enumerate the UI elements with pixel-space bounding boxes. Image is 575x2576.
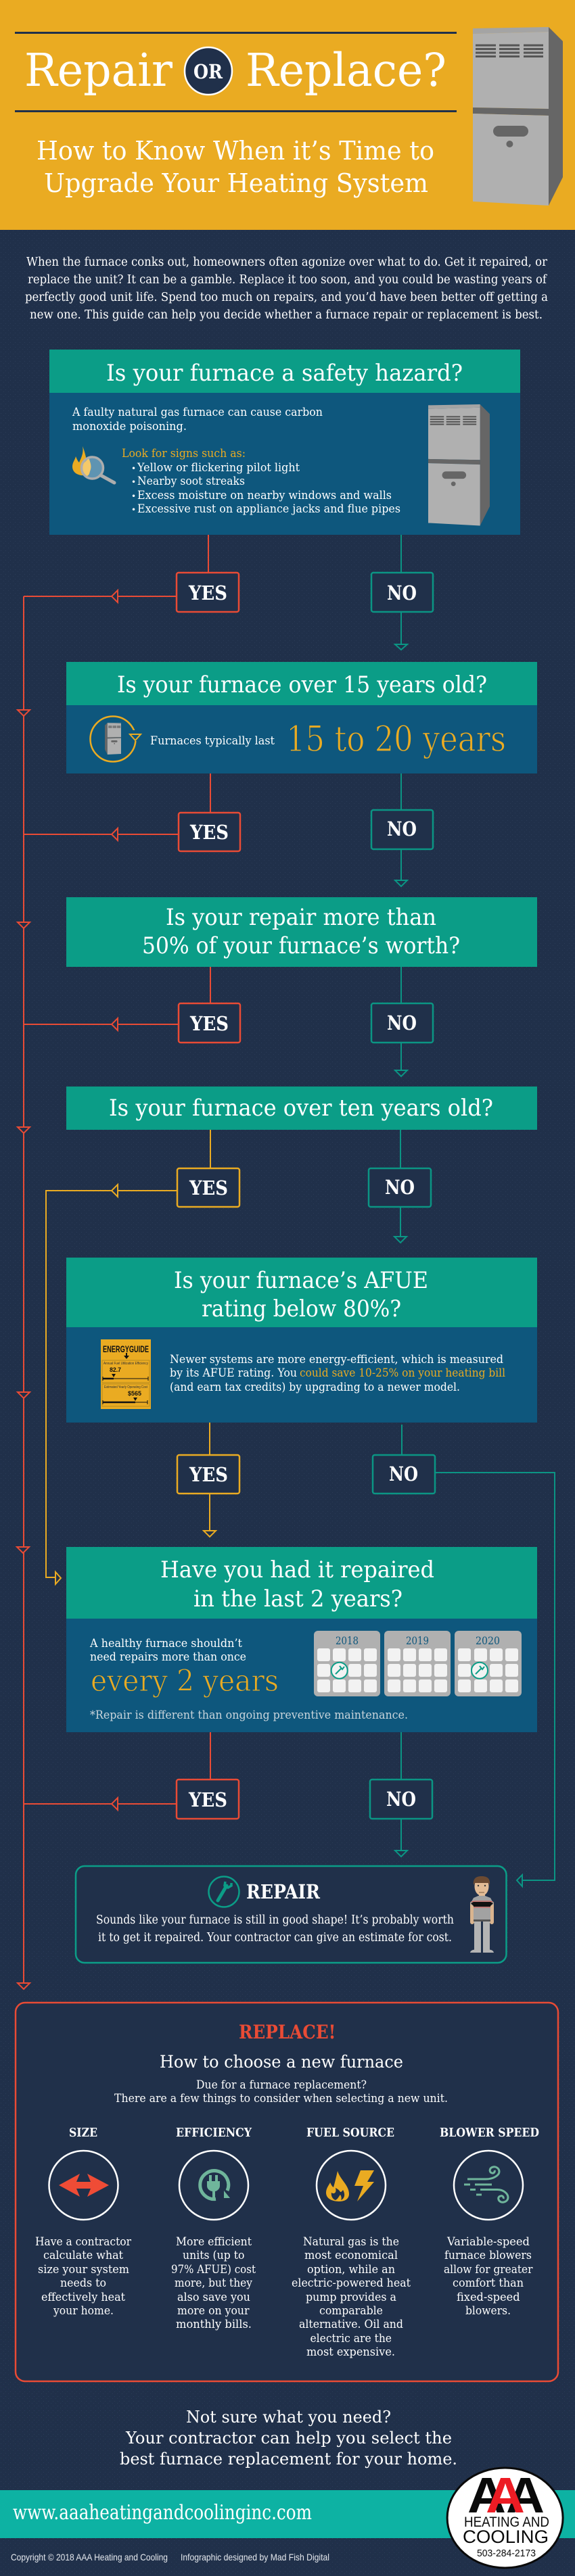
column: fuel source: most expensive. (306, 2345, 395, 2359)
heading: 50% of your furnace’s worth? (142, 932, 460, 959)
text block (170, 1353, 505, 1394)
column: blower speed (440, 2126, 539, 2318)
text block: need repairs more than once (90, 1650, 246, 1664)
heading: rating below 80%? (202, 1295, 401, 1322)
flow: 50 percent yes: YES (189, 1012, 229, 1035)
column: size: Have a contractor (35, 2235, 132, 2249)
logo: A (506, 2467, 545, 2523)
column: efficiency: more, but they (175, 2276, 252, 2290)
column: size: calculate what (43, 2249, 123, 2262)
column: fuel source: comparable (319, 2304, 383, 2318)
column: blower speed: furnace blowers (444, 2249, 532, 2262)
heading (160, 1556, 434, 1612)
sign list (122, 447, 400, 516)
column: fuel source: FUEL SOURCE (306, 2126, 394, 2140)
logo: A (486, 2467, 525, 2523)
flow: ten years no: NO (385, 1176, 415, 1199)
icon: wind (464, 2167, 508, 2202)
heading (174, 1267, 428, 1322)
icon: energy guide label: 82.7 (110, 1366, 121, 1373)
text block: Newer systems are more energy-efficient, which is measured (170, 1353, 503, 1366)
text block (96, 1913, 454, 1945)
intro text (25, 256, 548, 322)
flow: AFUE no: NO (389, 1462, 418, 1485)
logo: A (467, 2467, 506, 2523)
flow: last 2 years no (370, 1732, 432, 1857)
icon: size arrows (59, 2174, 109, 2197)
flow: AFUE no (373, 1425, 435, 1494)
teal no bypass line (435, 1473, 555, 1886)
lifespan number: 15 to 20 years (286, 719, 506, 760)
column: efficiency: 97% AFUE) cost (171, 2263, 256, 2276)
sign list: Excess moisture on nearby windows and walls (137, 489, 392, 502)
text block (89, 1637, 246, 1664)
panel: over ten years (66, 1087, 537, 1130)
subtitle (37, 136, 434, 198)
column: efficiency: more on your (177, 2304, 250, 2318)
flow: safety yes: YES (188, 581, 227, 604)
flow: AFUE yes (177, 1423, 239, 1537)
sign list: Excessive rust on appliance jacks and flue pipes (137, 502, 400, 516)
icon: furnace (473, 27, 563, 206)
flow: 50 percent no (371, 967, 433, 1076)
flow: safety yes (24, 535, 239, 612)
heading: Is your furnace a safety hazard? (106, 360, 463, 386)
intro: There are a few things to consider when selecting a new unit. (114, 2092, 448, 2105)
column: efficiency (171, 2126, 256, 2331)
icon: technician (470, 1876, 494, 1953)
closing text (120, 2407, 457, 2468)
heading: REPLACE! (239, 2021, 336, 2043)
heading: Is your repair more than (166, 904, 436, 930)
sign list: • (131, 464, 136, 473)
sign list: • (131, 505, 136, 515)
logo (447, 2467, 563, 2568)
flow: ten years yes (112, 1130, 239, 1207)
text block: A healthy furnace shouldn’t (89, 1637, 242, 1650)
flow: safety no: NO (387, 581, 417, 604)
calendars (314, 1631, 522, 1696)
column: fuel source: electric are the (310, 2332, 392, 2345)
heading: Have you had it repaired (160, 1556, 434, 1583)
column: size (35, 2126, 132, 2318)
column: fuel source: alternative. Oil and (299, 2318, 403, 2331)
panel: repair result (76, 1866, 506, 1963)
flow: last 2 years yes (24, 1732, 239, 1819)
column: fuel source: option, while an (307, 2263, 395, 2276)
panel: repaired in last 2 years (66, 1547, 537, 1732)
large callout: every 2 years (91, 1664, 279, 1698)
heading: Is your furnace over ten years old? (109, 1095, 493, 1121)
text block: (and earn tax credits) by upgrading to a newer model. (170, 1381, 460, 1394)
flow: 15 years no: NO (387, 817, 417, 840)
flow: 50 percent yes (24, 967, 240, 1043)
panel: replace (16, 2003, 558, 2381)
header banner (0, 0, 575, 230)
column: blower speed: blowers. (465, 2304, 511, 2318)
column: blower speed: allow for greater (444, 2263, 533, 2276)
intro text: perfectly good unit life. Spend too much on repairs, and you’d have been better off getting a (25, 291, 548, 304)
panel: over 15 years (66, 662, 537, 773)
text block (72, 406, 323, 433)
logo: HEATING AND (464, 2514, 549, 2530)
text block: by its AFUE rating. You (170, 1366, 297, 1380)
subtitle: How to Know When it’s Time to (37, 136, 434, 166)
title: Repair (24, 44, 173, 97)
flow: 15 years yes (24, 773, 240, 851)
sign list: • (131, 477, 136, 487)
column: efficiency: EFFICIENCY (176, 2126, 252, 2140)
flow: 15 years no (371, 773, 433, 886)
column: blower speed: comfort than (453, 2276, 524, 2290)
heading: Is your furnace’s AFUE (174, 1267, 428, 1293)
icon: flame and magnifier (72, 446, 114, 483)
column: efficiency: More efficient (176, 2235, 252, 2249)
column: fuel source: pump provides a (306, 2291, 396, 2304)
logo: COOLING (463, 2527, 549, 2547)
text block: Sounds like your furnace is still in good shape! It’s probably worth (96, 1913, 454, 1927)
flow: last 2 years no: NO (386, 1788, 416, 1811)
title: Replace? (246, 44, 446, 97)
footer band (0, 2490, 575, 2538)
column: blower speed: Variable-speed (446, 2235, 530, 2249)
logo: 503-284-2173 (477, 2548, 536, 2559)
subtitle: Upgrade Your Heating System (44, 168, 428, 198)
sign list: • (131, 492, 136, 501)
icon: energy guide label: Estimated Yearly Operating Cost (104, 1385, 148, 1389)
column: fuel source: Natural gas is the (303, 2235, 399, 2249)
footnote: *Repair is different than ongoing preventive maintenance. (90, 1709, 408, 1722)
closing text: Your contractor can help you select the (125, 2428, 452, 2448)
icon: energy guide label: ENERGYGUIDE (103, 1343, 149, 1354)
calendars: 2020 (476, 1634, 500, 1647)
icon: furnace lifecycle (91, 717, 143, 761)
yellow yes line (46, 1191, 177, 1584)
text block: it to get it repaired. Your contractor can give an estimate for cost. (98, 1931, 452, 1945)
text block: could save 10-25% on your heating bill (300, 1366, 505, 1380)
icon: energy guide label (101, 1339, 151, 1409)
subheading: How to choose a new furnace (160, 2052, 403, 2072)
flow: safety no (371, 535, 433, 650)
column: size: SIZE (69, 2126, 97, 2140)
icon: wrench (208, 1877, 239, 1907)
column: blower speed: BLOWER SPEED (440, 2126, 539, 2140)
flow: AFUE yes: YES (189, 1463, 228, 1486)
column: size: your home. (53, 2304, 114, 2318)
column: size: needs to (60, 2276, 106, 2290)
intro text: replace the unit? It can be a gamble. Replace it too soon, and you could be wasting years of (28, 273, 547, 287)
column: efficiency: monthly bills. (176, 2318, 252, 2331)
column: fuel source: electric-powered heat (292, 2276, 411, 2290)
panel: safety hazard (49, 350, 520, 535)
sign list: Nearby soot streaks (137, 475, 245, 488)
sign list: Look for signs such as: (122, 447, 246, 460)
panel: repair over 50 percent (66, 897, 537, 967)
icon: energy guide label: $565 (128, 1390, 141, 1397)
flow: 15 years yes: YES (189, 821, 229, 844)
copyright: Copyright © 2018 AAA Heating and Cooling (11, 2552, 168, 2562)
red yes trunk line (17, 596, 30, 1989)
flow: ten years yes: YES (189, 1176, 228, 1199)
heading: REPAIR (246, 1880, 321, 1903)
calendars: 2019 (406, 1634, 429, 1647)
copyright: Infographic designed by Mad Fish Digital (181, 2552, 329, 2562)
text block: A faulty natural gas furnace can cause carbon (72, 406, 323, 419)
icon: flame and lightning (326, 2170, 374, 2201)
title: OR (193, 60, 223, 83)
flow: last 2 years yes: YES (188, 1788, 227, 1811)
column: efficiency: also save you (177, 2291, 250, 2304)
column: fuel source: most economical (304, 2249, 398, 2262)
intro: Due for a furnace replacement? (196, 2078, 367, 2092)
icon: plug (200, 2171, 230, 2201)
title (24, 44, 446, 97)
column: size: effectively heat (41, 2291, 125, 2304)
column: size: size your system (38, 2263, 129, 2276)
icon: energy guide label: Annual Fuel Utilization Efficiency (104, 1362, 148, 1366)
sign list: Yellow or flickering pilot light (137, 461, 300, 475)
intro text: When the furnace conks out, homeowners often agonize over what to do. Get it repaired, or (26, 256, 548, 269)
icon: furnace small (428, 404, 490, 526)
intro text: new one. This guide can help you decide whether a furnace repair or replacement is best. (30, 308, 543, 322)
column: fuel source (292, 2126, 411, 2359)
website url: www.aaaheatingandcoolinginc.com (13, 2501, 312, 2525)
closing text: Not sure what you need? (186, 2407, 391, 2427)
heading (142, 904, 460, 959)
panel: AFUE rating (66, 1258, 537, 1423)
column: efficiency: units (up to (183, 2249, 245, 2262)
lifespan text: Furnaces typically last (150, 734, 275, 748)
closing text: best furnace replacement for your home. (120, 2449, 457, 2468)
intro (114, 2078, 448, 2105)
flow: ten years no (369, 1130, 431, 1243)
column: blower speed: fixed-speed (457, 2291, 520, 2304)
heading: Is your furnace over 15 years old? (117, 671, 487, 698)
calendars: 2018 (336, 1634, 359, 1647)
text block: monoxide poisoning. (72, 420, 187, 433)
flow: 50 percent no: NO (387, 1011, 417, 1034)
heading: in the last 2 years? (193, 1585, 402, 1612)
copyright (11, 2552, 329, 2562)
